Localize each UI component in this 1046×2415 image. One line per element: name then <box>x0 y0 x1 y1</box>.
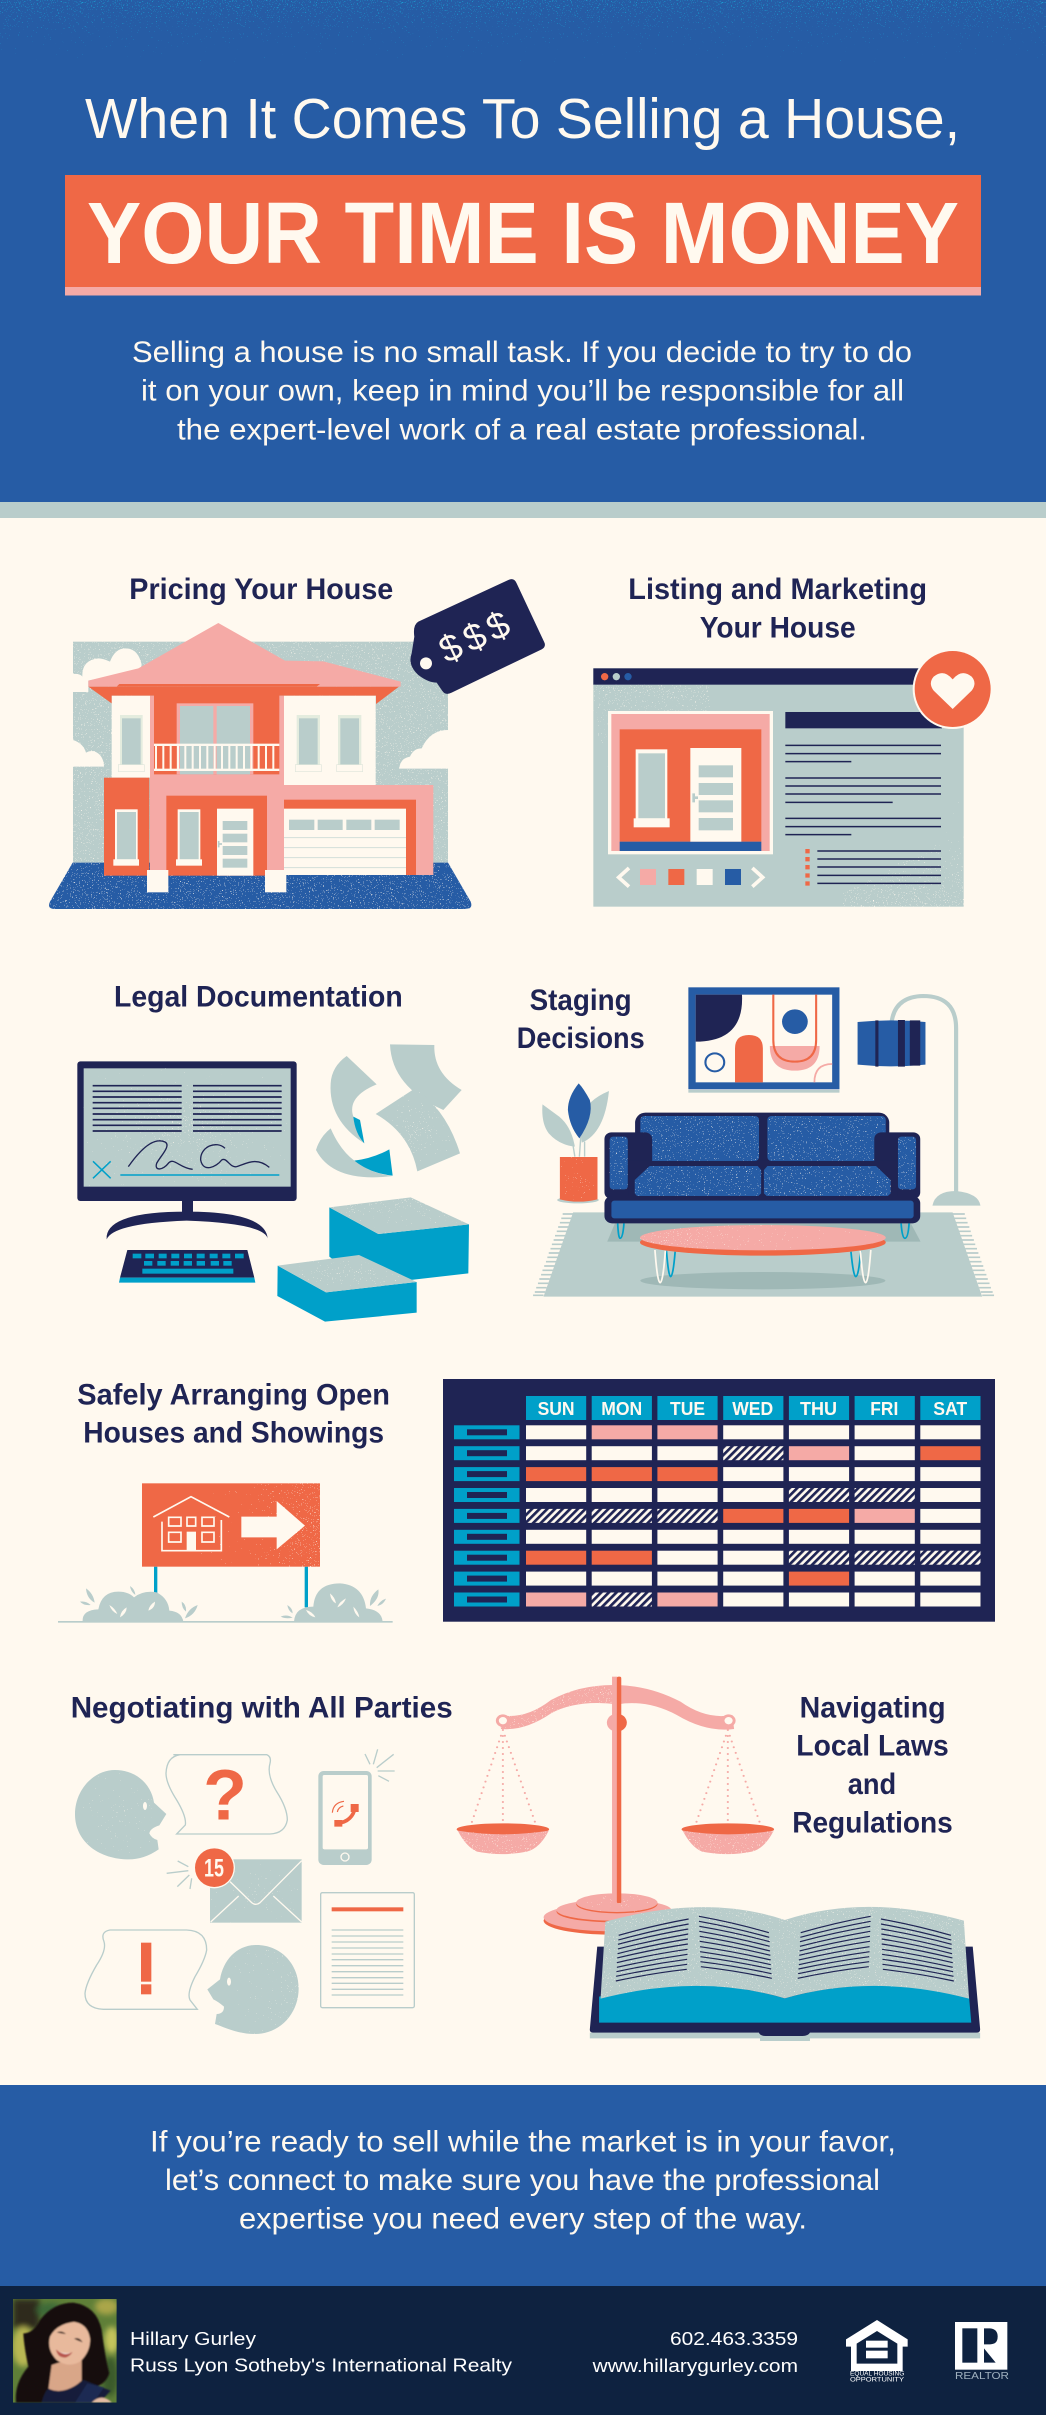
speaker one with question <box>75 1755 287 1859</box>
coffee table <box>640 1225 886 1283</box>
intro paragraph: it on your own, keep in mind you’ll be responsible for all <box>141 375 904 408</box>
wall art <box>688 987 839 1093</box>
panel: agent footer <box>0 2286 1046 2415</box>
keyboard <box>119 1250 255 1283</box>
heading: local laws: and <box>848 1768 896 1801</box>
heading: listing and marketing: Your House <box>700 611 856 644</box>
heading: open houses <box>77 1378 390 1450</box>
icon: equal housing opportunity: EQUAL HOUSING <box>850 2372 905 2378</box>
speaker one with question: ? <box>203 1755 247 1835</box>
rug <box>533 1212 994 1297</box>
icon: equal housing opportunity <box>846 2320 908 2384</box>
scales of justice <box>457 1677 774 1935</box>
open book <box>590 1907 980 2041</box>
icon: equal housing opportunity: OPPORTUNITY <box>850 2378 904 2384</box>
heading: staging decisions <box>517 984 645 1055</box>
icon: heart badge <box>913 649 993 729</box>
day headers: SAT <box>933 1398 968 1419</box>
heading: staging decisions: Staging <box>530 984 632 1017</box>
heading: local laws: Regulations <box>792 1806 953 1839</box>
icon: price tag: $ <box>432 624 469 671</box>
heading: open houses: Houses and Showings <box>83 1417 384 1450</box>
heading: listing and marketing <box>628 573 927 644</box>
panel: call to action: If you’re ready to sell while the market is in your favor, <box>150 2126 896 2159</box>
panel: call to action: expertise you need every step of the way. <box>239 2203 807 2236</box>
icon: price tag: $ <box>480 602 516 649</box>
heading: negotiating: Negotiating with All Parties <box>71 1691 453 1724</box>
title banner: YOUR TIME IS MONEY <box>87 185 959 282</box>
heading: staging decisions: Decisions <box>517 1022 645 1055</box>
agent photo <box>12 2299 119 2403</box>
panel: call to action <box>0 2085 1046 2286</box>
illustration: scales and book <box>457 1677 980 2041</box>
title line: When It Comes To Selling a House, <box>85 87 960 151</box>
heading: local laws: Local Laws <box>796 1730 949 1763</box>
intro paragraph: the expert-level work of a real estate professional. <box>177 414 867 447</box>
envelope with badge <box>167 1847 302 1923</box>
icon: price tag <box>410 579 545 694</box>
heading: open houses: Safely Arranging Open <box>77 1378 390 1411</box>
agent name and brokerage: Hillary Gurley <box>130 2328 257 2349</box>
icon: realtor <box>955 2322 1009 2382</box>
potted plant <box>542 1083 609 1203</box>
envelope with badge: 15 <box>204 1856 224 1883</box>
illustration: browser listing <box>593 649 993 907</box>
contact details: 602.463.3359 <box>670 2328 798 2349</box>
illustration: monitor and paperwork <box>77 1044 469 1322</box>
intro paragraph: Selling a house is no small task. If you decide to try to do <box>132 336 912 369</box>
agent name and brokerage: Russ Lyon Sotheby's International Realty <box>130 2355 513 2376</box>
sofa <box>604 1113 920 1238</box>
panel: header <box>0 0 1046 518</box>
heading: local laws <box>792 1691 953 1839</box>
icon: price tag: $ <box>456 613 493 660</box>
day headers: SUN <box>538 1398 575 1419</box>
phone <box>318 1749 395 1865</box>
intro paragraph <box>132 336 912 447</box>
day headers: TUE <box>670 1398 705 1419</box>
day headers: WED <box>732 1398 773 1419</box>
paper stacks <box>277 1197 469 1322</box>
heading: legal documentation: Legal Documentation <box>114 981 403 1014</box>
contact details: www.hillarygurley.com <box>592 2355 798 2376</box>
day headers: FRI <box>870 1398 898 1419</box>
floor lamp <box>858 996 980 1206</box>
heading: pricing: Pricing Your House <box>129 573 393 606</box>
agent name and brokerage <box>130 2328 513 2376</box>
illustration: living room <box>533 987 994 1297</box>
panel: call to action: let’s connect to make sure you have the professional <box>165 2164 880 2197</box>
bushes <box>58 1583 393 1623</box>
time labels <box>454 1425 520 1606</box>
heading: listing and marketing: Listing and Marketing <box>628 573 927 606</box>
flying papers <box>316 1044 462 1177</box>
sign board <box>142 1483 320 1567</box>
day headers: THU <box>800 1398 837 1419</box>
contact details <box>592 2328 798 2376</box>
document <box>321 1893 414 2008</box>
icon: realtor: REALTOR <box>955 2371 1009 2382</box>
chart: weekly calendar <box>443 1379 995 1622</box>
day headers <box>526 1396 980 1420</box>
speaker two with exclamation <box>85 1930 299 2034</box>
day headers: MON <box>601 1398 642 1419</box>
illustration: house with price tag <box>49 579 545 909</box>
illustration: open house sign <box>58 1483 393 1623</box>
heading: local laws: Navigating <box>800 1691 946 1724</box>
calendar cells <box>526 1425 980 1606</box>
illustration: communication icons <box>75 1749 414 2034</box>
monitor <box>77 1061 297 1239</box>
